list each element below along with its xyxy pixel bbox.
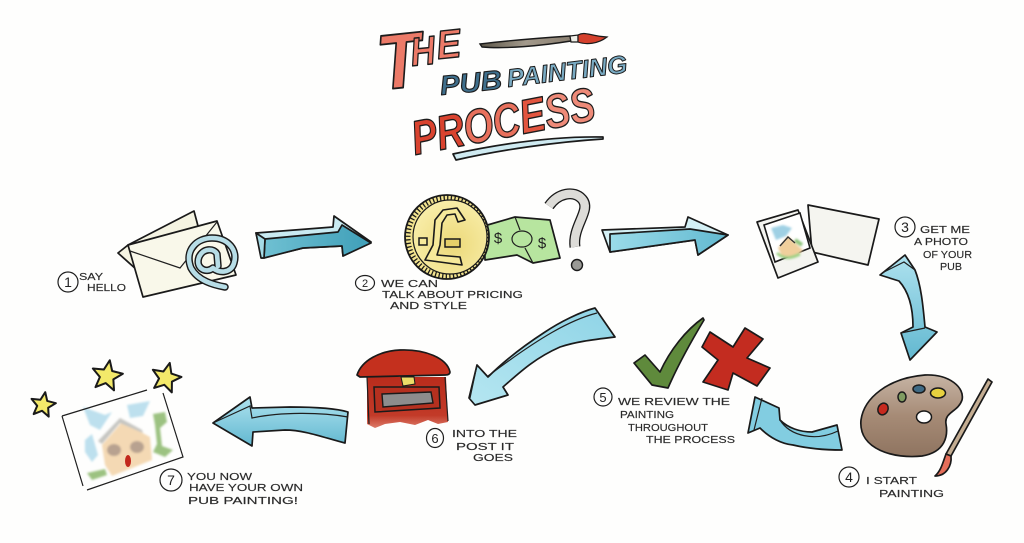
caption: you now have your own pub painting: YOU NOW (187, 471, 252, 483)
step 5: review (594, 318, 770, 446)
title underline (453, 137, 603, 160)
number 2 (356, 276, 374, 290)
icon: star right (149, 359, 184, 394)
icon: pound coin (405, 195, 489, 279)
icon: post box (357, 350, 450, 428)
icon: red cross (702, 328, 770, 390)
icon: envelopes with at sign (118, 211, 236, 297)
icon: star middle (90, 358, 125, 391)
icon: blank photo sheet (808, 205, 879, 265)
icon: banknote (484, 217, 560, 263)
icon: star left (29, 390, 57, 418)
icon: question mark (549, 194, 585, 270)
number 6 (426, 428, 444, 448)
caption: pricing and style: WE CAN (381, 278, 438, 290)
icon: palette (861, 375, 962, 457)
caption: into the post it goes: INTO THE (452, 428, 517, 440)
caption: get me a photo of your pub: PUB (940, 261, 962, 273)
caption: we review the painting: PAINTING (620, 409, 674, 421)
number 2: 2 (362, 278, 368, 290)
number 1: 1 (64, 274, 72, 290)
caption: I start painting: PAINTING (879, 488, 944, 500)
caption: we review the painting: THROUGHOUT (628, 422, 709, 434)
caption: get me a photo of your pub: OF YOUR (923, 249, 972, 261)
step 1: say hello (58, 211, 236, 297)
icon: green tick (634, 318, 704, 388)
heading words: Pub: PUB (438, 65, 503, 101)
arrow: step 2 to 3 (602, 217, 728, 255)
icon: banknote: $ (494, 230, 503, 247)
heading word: The (E): E (434, 22, 464, 68)
number 3 (895, 217, 915, 237)
caption: get me a photo of your pub: A PHOTO (914, 236, 968, 248)
number 7 (160, 469, 182, 491)
caption: we review the painting: WE REVIEW THE (618, 396, 730, 408)
caption: pricing and style: AND STYLE (390, 300, 467, 312)
caption: you now have your own pub painting: HAVE YOUR OWN (189, 482, 303, 494)
number 1 (58, 272, 78, 292)
arrow: step 3 to 4 (880, 255, 937, 360)
heading words: Painting: PAINTING (505, 50, 629, 93)
caption: you now have your own pub painting: PUB PAINTING! (188, 495, 298, 507)
caption: we review the painting: THE PROCESS (646, 434, 735, 446)
step 6: post box (357, 350, 517, 464)
step 2: pricing and style (356, 194, 585, 312)
caption: say hello: HELLO (87, 282, 126, 294)
number 5: 5 (599, 390, 607, 405)
step 3: get a photo (757, 205, 972, 278)
number 7: 7 (167, 472, 175, 488)
number 5 (594, 388, 612, 406)
caption: get me a photo of your pub: GET ME (920, 224, 970, 236)
icon: banknote: $ (538, 235, 547, 252)
title (373, 14, 629, 166)
caption: I start painting: I START (866, 475, 918, 487)
caption: into the post it goes: GOES (473, 452, 513, 464)
heading word: The: T (373, 14, 431, 107)
icon: framed pub painting (62, 390, 183, 490)
arrow: step 6 to 7 (213, 397, 348, 446)
heading word: The (H): H (408, 27, 438, 75)
number 4: 4 (845, 469, 853, 485)
step 4: start painting (839, 375, 992, 500)
step 7: finished painting (29, 358, 303, 507)
caption: say hello: SAY (79, 271, 103, 283)
arrow: step 1 to 2 (256, 216, 371, 258)
number 6: 6 (431, 431, 439, 446)
number 4 (839, 467, 859, 487)
caption: into the post it goes: POST IT (456, 441, 515, 453)
arrow: step 4 to 5 (748, 397, 842, 450)
icon: title paintbrush (480, 33, 607, 48)
number 3: 3 (901, 219, 909, 235)
icon: paintbrush (935, 379, 992, 476)
icon: polaroid photo (757, 210, 818, 278)
heading word: Process: PROCESS (407, 78, 600, 166)
arrow: step 5 to 6 (469, 308, 615, 405)
caption: pricing and style: TALK ABOUT PRICING (382, 289, 523, 301)
